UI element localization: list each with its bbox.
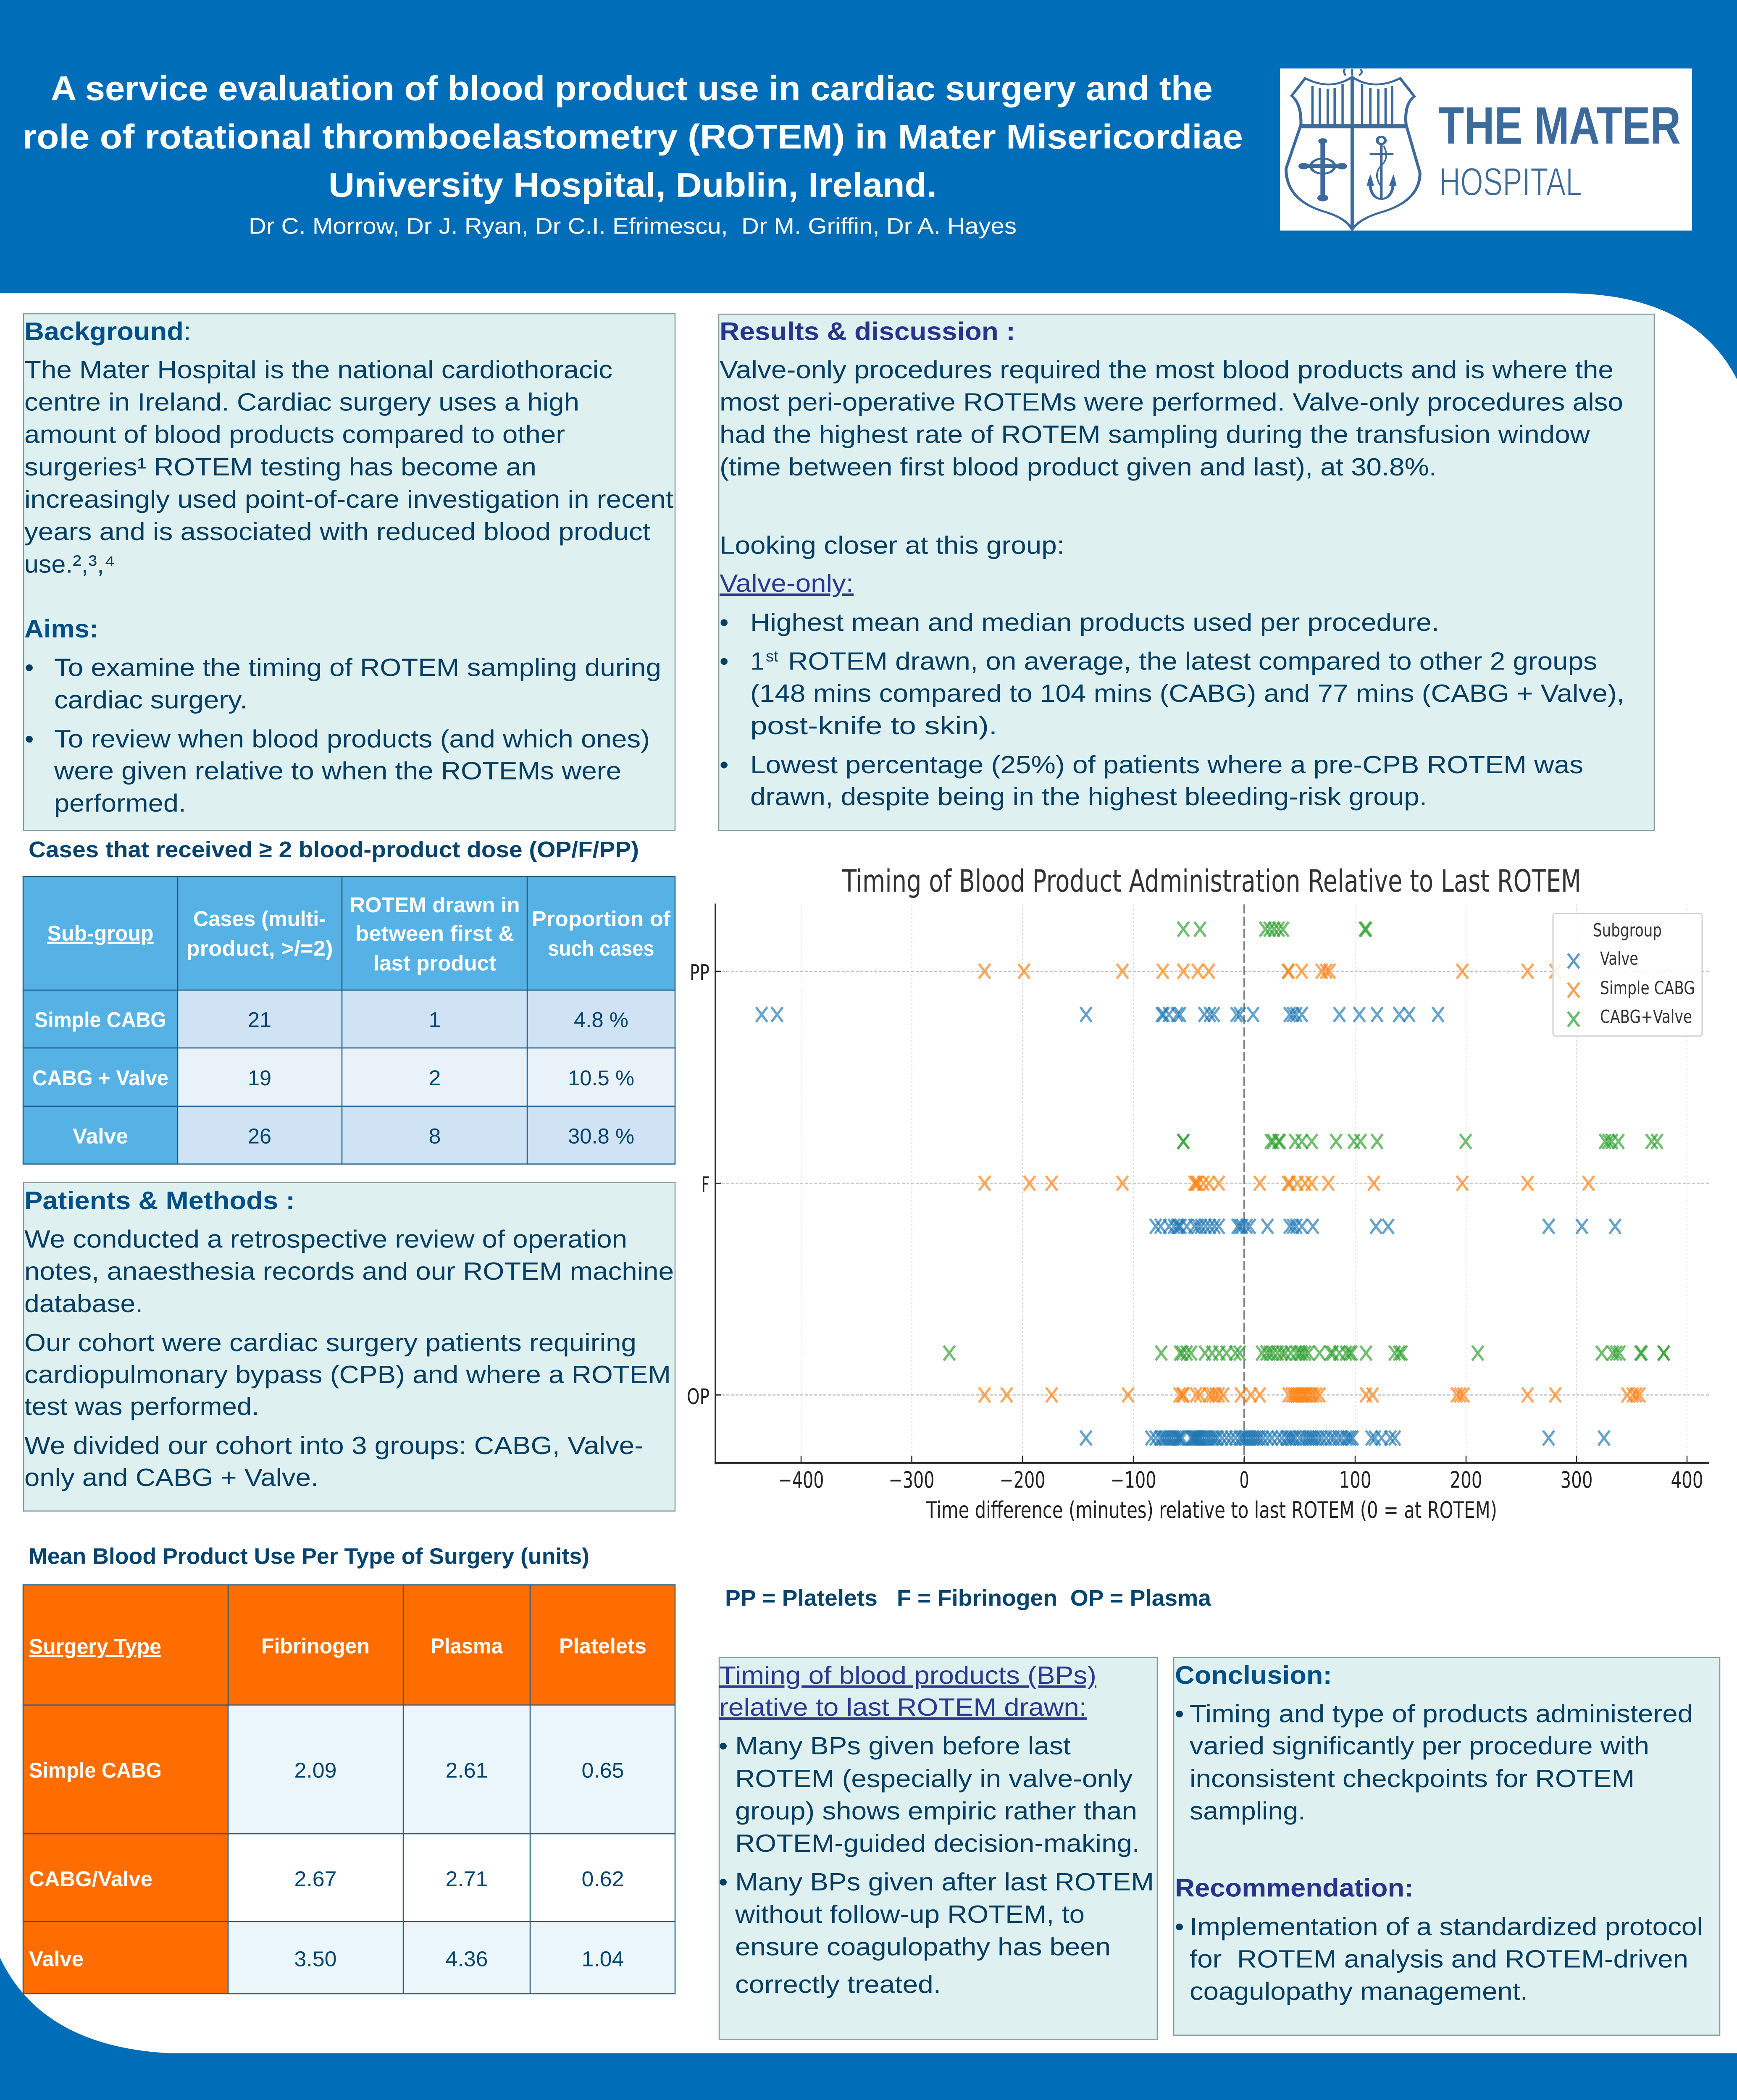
text: recommendation bullet: Implementation of a standardized protocol — [1190, 1912, 1703, 1940]
subheading: timing — [719, 1661, 1096, 1721]
text: aims bullets: • — [25, 724, 34, 753]
icon: crest shield — [1286, 69, 1420, 229]
text: background body — [24, 355, 673, 578]
legend: Valve — [1600, 948, 1638, 969]
table row: simple CABG — [34, 1008, 628, 1032]
table row: valve: Valve — [29, 1947, 84, 1971]
text: valve-only bullets: • — [720, 608, 728, 636]
x axis tick labels: 400 — [1671, 1467, 1703, 1493]
text: conclusion bullet: varied significantly per procedure with — [1190, 1731, 1649, 1760]
chart: timing of blood product administration — [687, 864, 1709, 1524]
series: F simple CABG — [979, 1176, 1594, 1191]
x axis tick labels — [778, 1467, 1703, 1493]
table row: CABG + valve — [32, 1066, 634, 1090]
y axis labels: OP — [687, 1384, 710, 1410]
table row: simple CABG: 0.65 — [581, 1758, 624, 1782]
title — [22, 69, 1243, 205]
x axis tick labels: 100 — [1339, 1467, 1372, 1493]
text: timing bullets: ROTEM-guided decision-making. — [735, 1829, 1140, 1857]
title: role of rotational thromboelastometry (ROTEM) in Mater Misericordiae — [22, 117, 1243, 156]
text: valve-only bullets: (148 mins compared to 104 mins (CABG) and 77 mins (CABG + Valve), — [750, 679, 1624, 707]
text: timing bullets: Many BPs given before last — [735, 1731, 1071, 1760]
text: aims bullets: performed. — [54, 789, 186, 817]
text: recommendation bullet: • — [1175, 1912, 1184, 1940]
text: results intro: Valve-only procedures required the most blood products and is where the — [720, 355, 1613, 383]
series: OP valve — [1080, 1431, 1610, 1445]
subheading: timing: relative to last ROTEM drawn: — [719, 1693, 1087, 1721]
text: recommendation bullet — [1175, 1912, 1703, 2006]
table header row — [29, 1634, 646, 1658]
series: PP simple CABG — [979, 964, 1561, 979]
text: background body: centre in Ireland. Cardiac surgery uses a high — [24, 388, 579, 416]
text: aims bullets — [25, 653, 661, 817]
table header row: ROTEM drawn in — [350, 892, 520, 917]
heading: aims: Aims: — [24, 614, 98, 643]
text: timing bullets: • — [719, 1868, 728, 1896]
heading: conclusion: Conclusion: — [1175, 1661, 1332, 1689]
text: conclusion bullet: Timing and type of products administered — [1190, 1699, 1693, 1727]
panel: timing of blood products — [719, 1657, 1157, 2039]
title: A service evaluation of blood product use in cardiac surgery and the — [51, 69, 1213, 108]
text: methods body: notes, anaesthesia records and our ROTEM machine — [24, 1257, 674, 1285]
text: valve-only bullets — [720, 608, 1624, 811]
table row: CABG + valve: 10.5 % — [568, 1066, 634, 1090]
x axis tick labels: 200 — [1450, 1467, 1482, 1493]
text: background body: The Mater Hospital is the national cardiothoracic — [24, 355, 612, 383]
table row: simple CABG: 21 — [248, 1008, 271, 1032]
series: PP valve — [756, 1007, 1444, 1022]
table header row: Platelets — [559, 1634, 646, 1658]
text: timing bullets: ensure coagulopathy has been — [735, 1932, 1111, 1961]
table header row: product, >/=2) — [187, 936, 333, 960]
text: background body: surgeries¹ ROTEM testing has become an — [24, 452, 536, 481]
table row: simple CABG: Simple CABG — [34, 1008, 166, 1032]
text: valve-only bullets: st — [766, 648, 778, 665]
table row: valve — [73, 1124, 634, 1148]
table row: valve: 8 — [429, 1124, 441, 1148]
panel: results and discussion — [719, 314, 1654, 831]
text: timing bullets — [719, 1731, 1154, 1998]
text: background body: years and is associated with reduced blood product — [24, 517, 650, 546]
text: methods body: Our cohort were cardiac surgery patients requiring — [24, 1328, 636, 1357]
subheading: valve-only: Valve-only: — [720, 569, 854, 597]
x axis tick labels: 0 — [1239, 1467, 1249, 1493]
text: background body: use.²,³,⁴ — [24, 550, 115, 578]
text: aims bullets: To examine the timing of ROTEM sampling during — [54, 653, 661, 681]
table row: CABG/valve: CABG/Valve — [29, 1867, 152, 1891]
text: methods body: database. — [24, 1289, 143, 1318]
text: valve-only bullets: drawn, despite being in the highest bleeding-risk group. — [750, 782, 1427, 811]
text: background body: amount of blood products compared to other — [24, 420, 565, 449]
x axis tick labels: −400 — [778, 1467, 824, 1493]
heading: recommendation: Recommendation: — [1175, 1874, 1414, 1902]
text: methods body: test was performed. — [24, 1392, 259, 1420]
text: results intro: had the highest rate of ROTEM sampling during the transfusion window — [720, 420, 1590, 449]
y axis labels — [687, 961, 710, 1410]
table row: simple CABG — [29, 1758, 624, 1782]
text: results intro: (time between first blood product given and last), at 30.8%. — [720, 452, 1437, 481]
table row: CABG/valve: 0.62 — [581, 1867, 624, 1891]
table row: CABG + valve: CABG + Valve — [32, 1066, 168, 1090]
table header row: Sub-group — [47, 921, 154, 945]
text: valve-only bullets: 1 — [750, 647, 765, 675]
text: timing bullets: group) shows empiric rather than — [735, 1797, 1137, 1825]
text: valve-only bullets: • — [720, 647, 728, 675]
x axis tick labels: 300 — [1560, 1467, 1593, 1493]
table row: CABG/valve: 2.71 — [445, 1867, 488, 1891]
text: aims bullets: • — [25, 653, 34, 681]
table row: valve: 30.8 % — [568, 1124, 634, 1148]
y axis labels: PP — [690, 961, 710, 985]
text: valve-only bullets: ROTEM drawn, on average, the latest compared to other 2 groups — [788, 647, 1597, 675]
table row: CABG + valve: 19 — [248, 1066, 271, 1090]
legend: Simple CABG — [1600, 978, 1695, 999]
table header row: Fibrinogen — [261, 1634, 370, 1658]
legend — [1553, 914, 1702, 1036]
chart abbreviation key: PP = Platelets F = Fibrinogen OP = Plasma — [725, 1586, 1211, 1611]
table row: simple CABG: 4.8 % — [574, 1008, 628, 1032]
text: conclusion bullet: sampling. — [1190, 1797, 1306, 1825]
series: F valve — [1150, 1219, 1621, 1234]
heading: results and discussion: Results & discussion : — [720, 317, 1015, 345]
table row: valve — [29, 1947, 624, 1971]
x axis tick labels: −200 — [1000, 1467, 1046, 1493]
table header row: such cases — [548, 936, 654, 960]
text: timing bullets: • — [719, 1731, 728, 1760]
table header row: Cases (multi- — [193, 907, 326, 931]
table row: CABG + valve: 2 — [429, 1066, 441, 1090]
text: conclusion bullet: • — [1175, 1699, 1184, 1727]
table header row: between first & — [355, 921, 514, 945]
logo subtitle: HOSPITAL — [1439, 160, 1582, 204]
series: OP simple CABG — [979, 1388, 1645, 1402]
table: cases by sub-group — [23, 877, 675, 1164]
text: results intro — [720, 355, 1623, 559]
header band — [0, 0, 1737, 379]
text: background body: increasingly used point-of-care investigation in recent — [24, 485, 673, 513]
text: recommendation bullet: coagulopathy management. — [1190, 1977, 1528, 2006]
text: aims bullets: were given relative to when the ROTEMs were — [54, 756, 621, 785]
table: mean blood product use — [23, 1585, 675, 1994]
text: timing bullets: Many BPs given after last ROTEM — [735, 1868, 1154, 1896]
table row: simple CABG: Simple CABG — [29, 1758, 162, 1782]
text: aims bullets: To review when blood products (and which ones) — [54, 724, 650, 753]
series: OP CABG+Valve — [943, 1346, 1669, 1360]
table header row: Proportion of — [532, 907, 671, 931]
text: methods body: We conducted a retrospective review of operation — [24, 1225, 627, 1253]
title: University Hospital, Dublin, Ireland. — [328, 166, 937, 205]
table header row — [47, 892, 671, 975]
axes — [715, 903, 1709, 1464]
bottom band — [0, 1958, 1737, 2100]
panel: patients and methods — [24, 1182, 675, 1511]
heading: cases table: Cases that received ≥ 2 blood-product dose (OP/F/PP) — [29, 837, 639, 862]
series: F CABG+Valve — [1178, 1134, 1663, 1149]
text: recommendation bullet: for ROTEM analysis and ROTEM-driven — [1190, 1945, 1688, 1973]
logo: The Mater Hospital — [1280, 68, 1692, 231]
text: valve-only bullets: Lowest percentage (25%) of patients where a pre-CPB ROTEM was — [750, 750, 1583, 779]
text: aims bullets: cardiac surgery. — [54, 685, 247, 714]
subheading: timing: Timing of blood products (BPs) — [719, 1661, 1096, 1689]
table row: simple CABG: 2.61 — [445, 1758, 488, 1782]
x axis tick labels: −300 — [889, 1467, 934, 1493]
text: timing bullets: ROTEM (especially in valve-only — [735, 1764, 1133, 1793]
table row: valve: Valve — [73, 1124, 128, 1148]
table row: simple CABG: 1 — [429, 1008, 441, 1032]
table header row: Surgery Type — [29, 1634, 161, 1658]
x axis label: Time difference (minutes) relative to last ROTEM (0 = at ROTEM) — [926, 1497, 1497, 1524]
text: valve-only bullets: post-knife to skin). — [750, 711, 997, 740]
authors: Dr C. Morrow, Dr J. Ryan, Dr C.I. Efrimescu, Dr M. Griffin, Dr A. Hayes — [249, 213, 1017, 239]
table row: valve: 26 — [248, 1124, 271, 1148]
series: PP CABG+Valve — [1178, 922, 1663, 937]
table row: valve: 3.50 — [294, 1947, 337, 1971]
text: timing bullets: correctly treated. — [735, 1970, 941, 1998]
panel: conclusion and recommendation — [1174, 1657, 1720, 2035]
table row: valve: 1.04 — [581, 1947, 624, 1971]
text: results intro: Looking closer at this group: — [720, 531, 1064, 559]
heading: patients and methods: Patients & Methods : — [24, 1186, 295, 1215]
text: results intro: most peri-operative ROTEMs were performed. Valve-only procedures also — [720, 388, 1623, 416]
table row: valve: 4.36 — [445, 1947, 488, 1971]
table header row: Plasma — [431, 1634, 503, 1658]
text: valve-only bullets: • — [720, 750, 728, 779]
text: conclusion bullet: inconsistent checkpoints for ROTEM — [1190, 1764, 1635, 1793]
x axis tick labels: −100 — [1111, 1467, 1156, 1493]
text: methods body: cardiopulmonary bypass (CPB) and where a ROTEM — [24, 1360, 671, 1389]
text: methods body — [24, 1225, 674, 1491]
text: conclusion bullet — [1175, 1699, 1693, 1825]
table row: CABG/valve: 2.67 — [294, 1867, 337, 1891]
legend: Subgroup — [1593, 920, 1662, 941]
y axis labels: F — [702, 1172, 710, 1197]
table header row: last product — [373, 951, 496, 975]
text: timing bullets: without follow-up ROTEM, to — [735, 1900, 1085, 1928]
table row: CABG/valve — [29, 1867, 624, 1891]
legend: CABG+Valve — [1600, 1007, 1692, 1027]
text: methods body: only and CABG + Valve. — [24, 1463, 318, 1491]
text: valve-only bullets: Highest mean and median products used per procedure. — [750, 608, 1439, 636]
table row: simple CABG: 2.09 — [294, 1758, 337, 1782]
panel: background and aims — [24, 314, 675, 831]
heading: background: Background : — [24, 317, 191, 345]
heading: mean product table: Mean Blood Product Use Per Type of Surgery (units) — [29, 1544, 589, 1569]
text: methods body: We divided our cohort into 3 groups: CABG, Valve- — [24, 1431, 644, 1460]
